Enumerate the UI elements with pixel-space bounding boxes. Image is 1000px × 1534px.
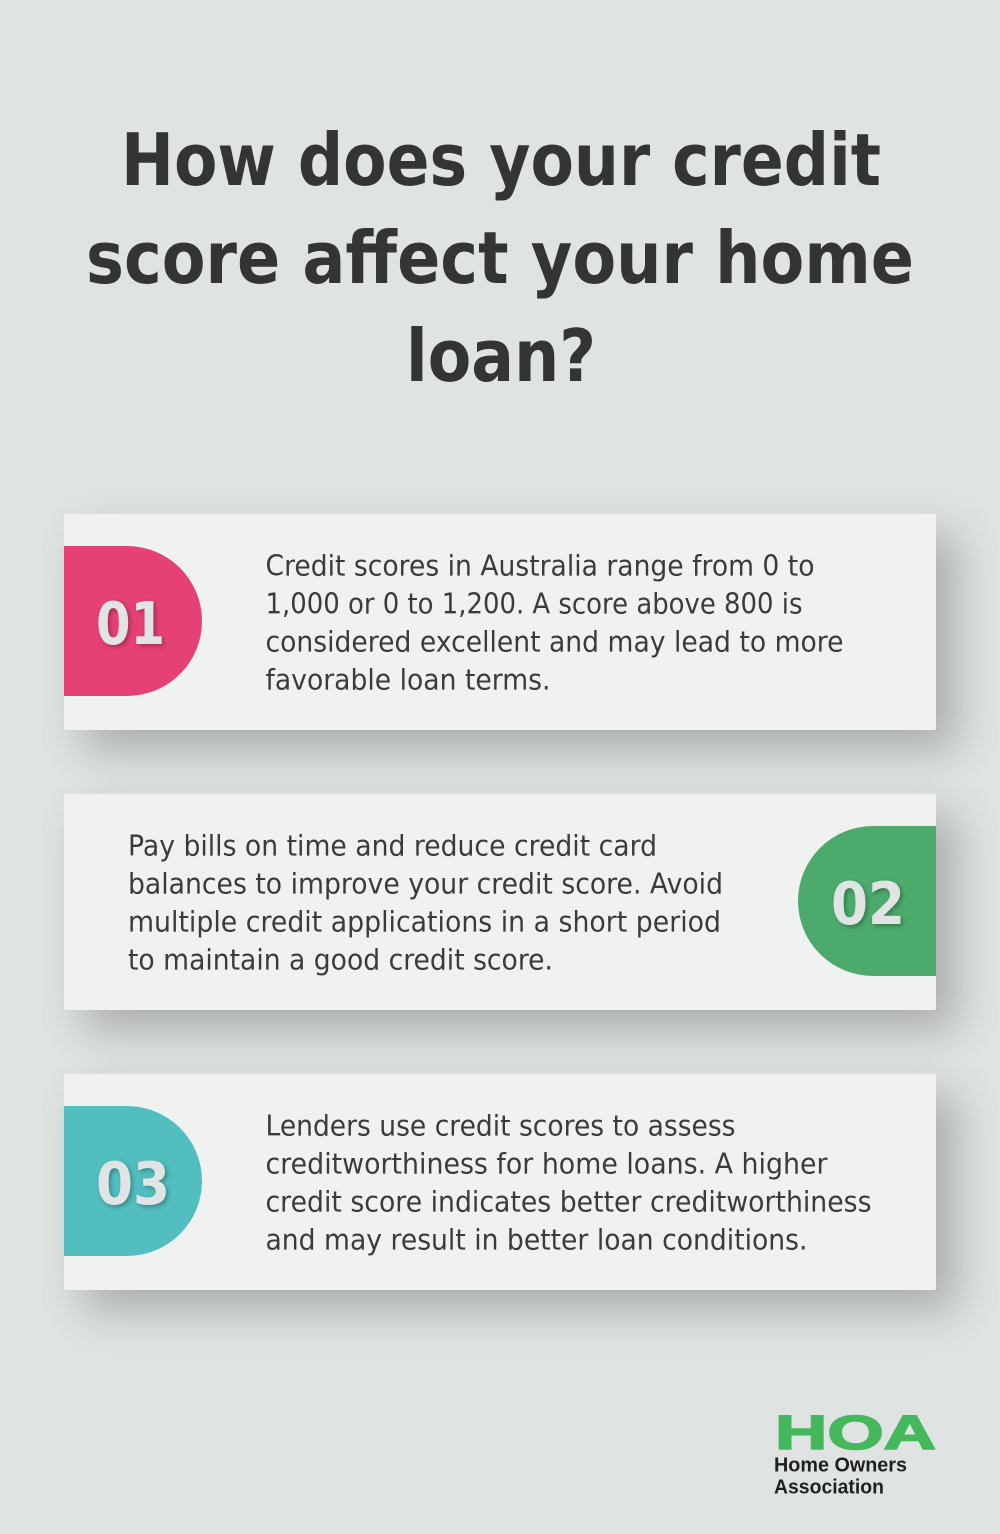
card 1 background xyxy=(64,514,936,730)
title: loan? xyxy=(406,314,596,398)
text block 2 xyxy=(128,830,723,976)
card 3 background xyxy=(64,1074,936,1290)
text block 3: Lenders use credit scores to assess xyxy=(266,1110,736,1142)
text block 2: Pay bills on time and reduce credit card xyxy=(128,830,657,862)
text block 1: Credit scores in Australia range from 0 to xyxy=(266,550,814,582)
text block 1: favorable loan terms. xyxy=(266,664,550,696)
number 03: 03 xyxy=(96,1149,170,1218)
logo: Home Owners Association: HOA xyxy=(775,1407,936,1460)
number 02: 02 xyxy=(831,869,905,938)
text block 3: and may result in better loan conditions. xyxy=(266,1224,808,1256)
title: How does your credit xyxy=(121,118,881,202)
badge 03 xyxy=(64,1106,202,1256)
text block 3: creditworthiness for home loans. A higher xyxy=(266,1148,828,1180)
number 01: 01 xyxy=(96,589,165,658)
text block 1: 1,000 or 0 to 1,200. A score above 800 is xyxy=(266,588,802,620)
text block 3 xyxy=(266,1110,872,1256)
text block 1 xyxy=(266,550,844,696)
badge 02 xyxy=(798,826,936,976)
text block 2: multiple credit applications in a short period xyxy=(128,906,721,938)
logo: Home Owners Association: Association xyxy=(774,1476,884,1498)
badge 01 xyxy=(64,546,202,696)
text block 1: considered excellent and may lead to more xyxy=(266,626,844,658)
text block 2: to maintain a good credit score. xyxy=(128,944,553,976)
text block 2: balances to improve your credit score. Avoid xyxy=(128,868,723,900)
title: score affect your home xyxy=(86,216,914,300)
text block 3: credit score indicates better creditworthiness xyxy=(266,1186,872,1218)
card 2 background xyxy=(64,794,936,1010)
title xyxy=(86,118,914,398)
logo: Home Owners Association: Home Owners xyxy=(774,1454,907,1476)
logo: Home Owners Association xyxy=(774,1407,936,1498)
